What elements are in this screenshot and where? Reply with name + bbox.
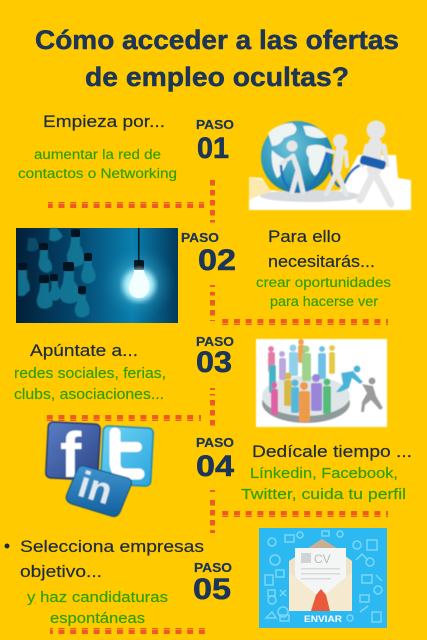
icon: CV envelope send: [259, 528, 387, 628]
icon: facebook tile: f: [60, 419, 82, 491]
panel: paso 02 text: necesitarás...: [268, 252, 375, 271]
paso 04 label: PASO: [196, 436, 234, 450]
panel: paso 02 text: [256, 227, 391, 309]
paso 02 label: PASO: [181, 231, 219, 245]
panel: paso 04 text: Twitter, cuida tu perfil: [241, 487, 406, 503]
panel: paso 02 text: crear oportunidades: [256, 275, 391, 290]
panel: paso 05 text: objetivo...: [20, 562, 102, 581]
icon: twitter tile: [101, 426, 153, 486]
panel: paso 01 text: [18, 112, 177, 181]
paso 05 label: PASO: [194, 561, 232, 575]
panel: paso 03 text: redes sociales, ferias,: [14, 366, 166, 382]
paso 03 label: PASO: [196, 335, 234, 349]
divider: dotted path 02: [210, 285, 388, 325]
paso 02 label: [181, 231, 236, 277]
paso 02 label: 02: [198, 244, 236, 277]
title: de empleo ocultas?: [85, 62, 349, 92]
divider: dotted path 04: [210, 490, 388, 533]
panel: paso 04 text: Dedícale tiempo ...: [252, 442, 412, 461]
panel: paso 04 text: [241, 442, 412, 503]
panel: paso 01 text: contactos o Networking: [18, 166, 177, 181]
panel: paso 01 text: Empieza por...: [43, 112, 165, 131]
paso 04 label: [196, 436, 234, 483]
icon: CV envelope send: CV: [314, 552, 331, 566]
paso 03 label: 03: [196, 346, 232, 379]
image: light bulbs: [16, 228, 178, 323]
panel: paso 04 text: Línkedin, Facebook,: [250, 466, 398, 482]
panel: paso 05 text: y haz candidaturas: [27, 590, 168, 606]
panel: paso 03 text: Apúntate a...: [30, 341, 138, 360]
icon: globe and people networking: [249, 120, 411, 210]
panel: paso 01 text: aumentar la red de: [34, 147, 161, 162]
paso 05 label: [193, 561, 232, 606]
icon: CV envelope send: ENVIAR: [304, 614, 343, 624]
divider: dotted path 05: [50, 628, 209, 634]
panel: paso 05 text: Selecciona empresas: [20, 537, 204, 556]
paso 03 label: [196, 335, 234, 379]
paso 01 label: [196, 118, 234, 165]
icon: linkedin tile: in: [74, 463, 117, 512]
panel: paso 02 text: Para ello: [268, 227, 341, 246]
panel: paso 02 text: para hacerse ver: [270, 294, 379, 309]
paso 01 label: 01: [197, 132, 229, 165]
divider: dotted path 03: [46, 388, 215, 428]
paso 04 label: 04: [196, 450, 234, 483]
panel: paso 05 text: [4, 537, 204, 627]
divider: dotted path 01: [48, 179, 215, 222]
icon: facebook twitter linkedin: [46, 419, 153, 516]
panel: paso 03 text: [14, 341, 166, 403]
panel: paso 05 text: espontáneas: [50, 611, 145, 627]
title: [35, 25, 399, 92]
icon: group of people on platform: [256, 339, 387, 427]
panel: paso 03 text: clubs, asociaciones...: [14, 387, 164, 403]
paso 01 label: PASO: [196, 118, 234, 132]
title: Cómo acceder a las ofertas: [35, 25, 399, 55]
paso 05 label: 05: [193, 573, 231, 606]
